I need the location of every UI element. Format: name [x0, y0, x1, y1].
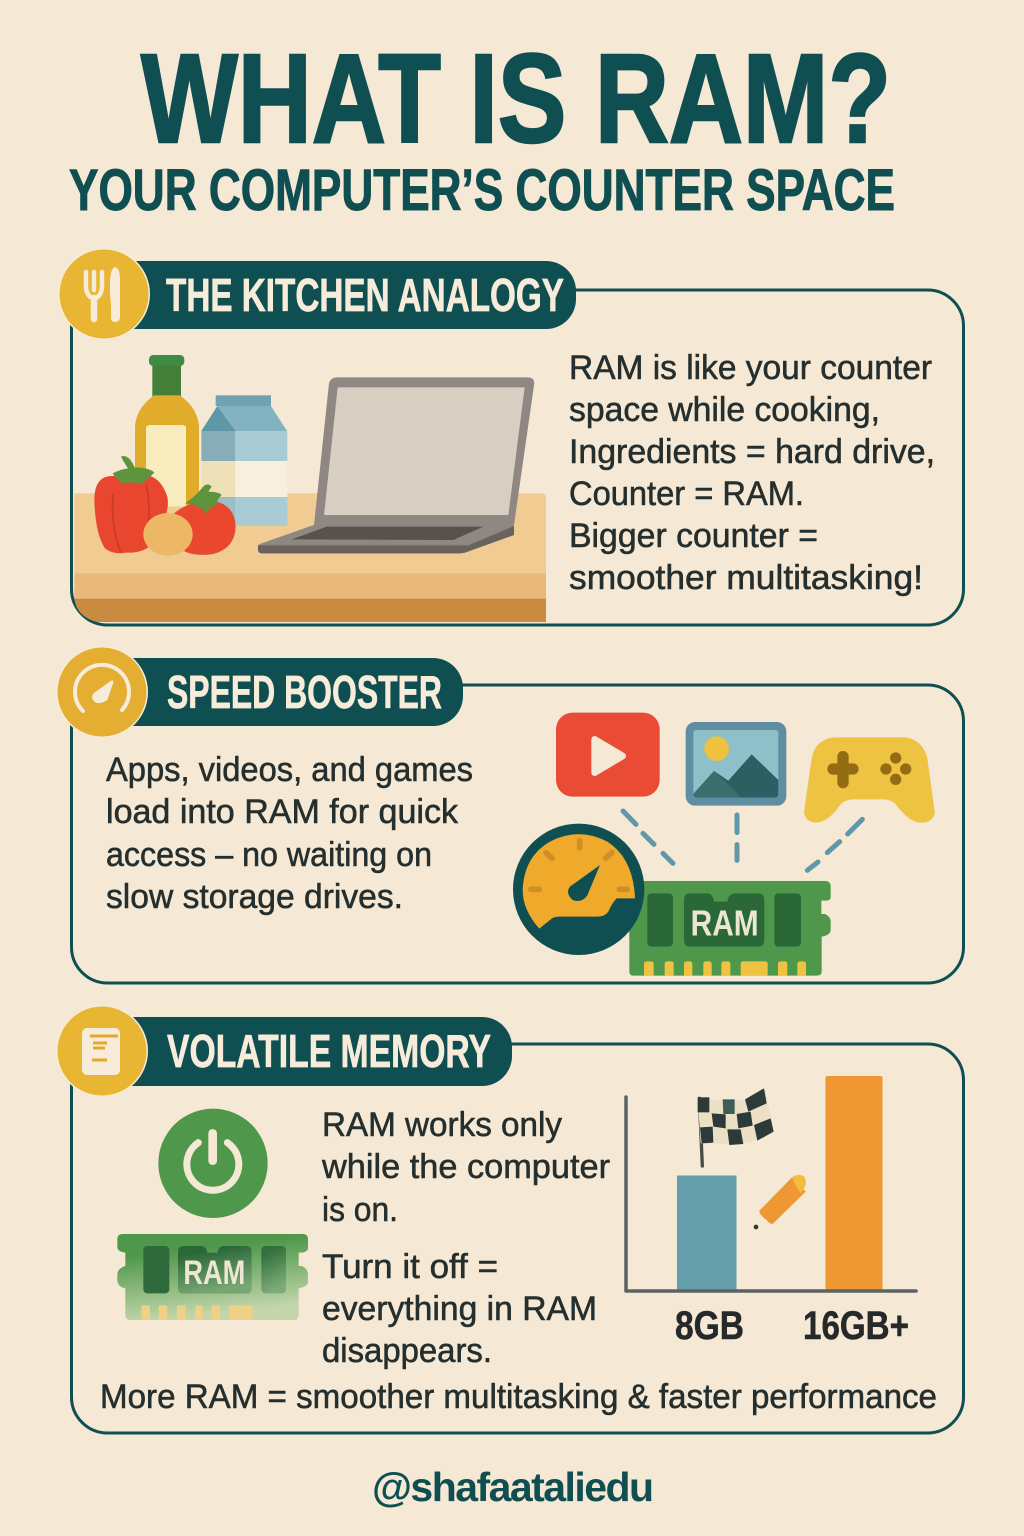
- counter: [74, 493, 546, 622]
- panel frame: [72, 1044, 964, 1433]
- panel text: load into RAM for quick: [106, 793, 459, 831]
- panel text: access – no waiting on: [106, 836, 432, 874]
- milk carton: [201, 395, 287, 526]
- app illustration: [513, 713, 935, 976]
- heading: SPEED BOOSTER: [167, 666, 442, 718]
- panel text: Counter = RAM.: [569, 475, 804, 513]
- panel text: RAM is like your counter: [569, 349, 932, 387]
- fading RAM module: RAM: [183, 1254, 245, 1292]
- panel text: is on.: [322, 1191, 398, 1229]
- bell pepper: [94, 456, 168, 553]
- panel frame: [72, 290, 964, 625]
- panel text: Turn it off =: [322, 1248, 498, 1286]
- tomato: [173, 485, 236, 555]
- kitchen illustration: [74, 355, 546, 622]
- potato: [143, 513, 193, 556]
- summary line: More RAM = smoother multitasking & faster performance: [100, 1378, 937, 1416]
- panel text: everything in RAM: [322, 1290, 597, 1328]
- header pill: [100, 658, 463, 726]
- icon: fork and knife: [58, 248, 150, 340]
- icon: notepad: [56, 1005, 148, 1097]
- bar chart: [626, 1076, 916, 1348]
- panel: speed booster: [56, 646, 964, 983]
- panel: volatile memory: [56, 1005, 964, 1433]
- 8GB label: 8GB: [675, 1304, 744, 1348]
- heading: THE KITCHEN ANALOGY: [166, 269, 564, 321]
- panel text: RAM works only: [322, 1106, 562, 1144]
- panel text: while the computer: [321, 1148, 610, 1186]
- panel text: Bigger counter =: [569, 517, 818, 555]
- heading: VOLATILE MEMORY: [167, 1025, 491, 1077]
- panel: the kitchen analogy: [58, 248, 964, 625]
- power and fading RAM illustration: [117, 1109, 308, 1320]
- icon: pencil: [754, 1175, 806, 1229]
- laptop: [258, 377, 534, 553]
- icon: checkered flag: [698, 1088, 774, 1166]
- panel text: space while cooking,: [569, 391, 880, 429]
- panel text: slow storage drives.: [106, 878, 403, 916]
- panel text: [321, 1106, 610, 1370]
- icon: power button: [158, 1109, 268, 1218]
- icon: speedometer: [56, 646, 148, 738]
- panel text: [569, 349, 935, 597]
- bottle: [135, 355, 199, 507]
- dashed connectors: [623, 811, 862, 870]
- panel text: disappears.: [322, 1332, 492, 1370]
- RAM module: RAM: [691, 902, 759, 943]
- panel text: Apps, videos, and games: [106, 751, 473, 789]
- header pill: [100, 1017, 512, 1086]
- header pill: [100, 261, 576, 329]
- icon: photo: [686, 722, 786, 806]
- credit handle: @shafaataliedu: [372, 1464, 654, 1510]
- panel text: Ingredients = hard drive,: [569, 433, 935, 471]
- fading RAM module: [117, 1234, 308, 1320]
- panel frame: [72, 685, 964, 983]
- axes: [626, 1097, 916, 1291]
- 16GB+ label: 16GB+: [803, 1304, 909, 1348]
- icon: game controller: [804, 737, 935, 823]
- 8GB bar: [677, 1176, 736, 1290]
- icon: video play: [556, 713, 660, 797]
- panel text: smoother multitasking!: [569, 559, 923, 597]
- speedometer gauge: [513, 824, 644, 955]
- 16GB bar: [826, 1076, 882, 1291]
- panel text: [106, 751, 473, 916]
- RAM module: [629, 881, 831, 976]
